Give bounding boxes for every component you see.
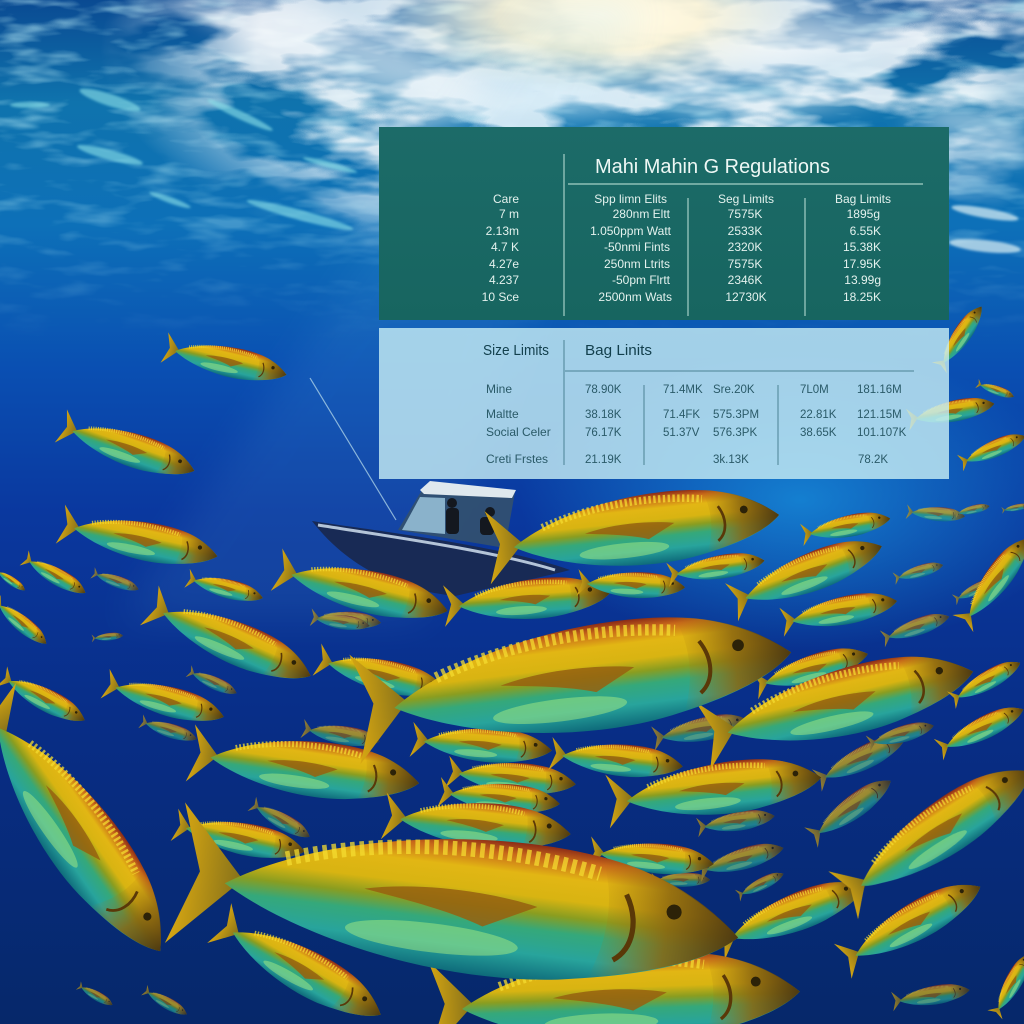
sub-headings: Size Limits	[483, 342, 549, 359]
third column: seg limits: 7575K	[728, 257, 762, 271]
value columns: 38.65K	[800, 427, 837, 439]
second column: spp limits: 2500nm Wats	[598, 290, 672, 304]
third column: seg limits: 2346K	[728, 273, 762, 287]
value columns: 576.3PK	[713, 427, 757, 439]
first column: care: 4.7 K	[491, 240, 519, 254]
first column: care: 4.237	[489, 273, 519, 287]
mid school of mahi-mahi	[0, 332, 1024, 1024]
fish behind translucent panel	[906, 302, 996, 431]
row labels: Creti Frstes	[486, 452, 548, 466]
value columns: 121.15M	[857, 409, 902, 421]
foreground fish: large bottom	[165, 801, 746, 1012]
row labels	[486, 382, 551, 466]
third column: seg limits	[718, 192, 774, 304]
sub-headings: Bag Linits	[585, 342, 652, 359]
value columns: 101.107K	[857, 427, 907, 439]
third column: seg limits: Seg Limits	[718, 192, 774, 206]
second column: spp limits: -50nmi Fints	[604, 240, 670, 254]
first column: care: 7 m	[499, 207, 519, 221]
foreground fish: large centre	[347, 600, 798, 764]
first column: care: Care	[493, 192, 519, 206]
fourth column: bag limits: 6.55K	[850, 224, 881, 238]
row labels: Social Celer	[486, 425, 551, 439]
value columns: 71.4MK	[663, 384, 703, 396]
value columns: Sre.20K	[713, 384, 755, 396]
second column: spp limits: -50pm Flrtt	[612, 273, 671, 287]
fourth column: bag limits: Bag Limits	[835, 192, 891, 206]
panel: lower size and bag limits table	[379, 328, 949, 479]
first column: care: 4.27e	[489, 257, 519, 271]
fourth column: bag limits: 18.25K	[843, 290, 881, 304]
value columns: 51.37V	[663, 427, 700, 439]
boat with anglers	[312, 481, 570, 596]
first column: care: 10 Sce	[482, 290, 519, 304]
second column: spp limits: Spp limn Elits	[594, 192, 667, 206]
heading: Mahi Mahin G Regulations	[595, 156, 830, 178]
far school of small fish	[76, 502, 1024, 1020]
foreground fish: lower right	[827, 749, 1024, 919]
second column: spp limits: 280nm Eltt	[613, 207, 671, 221]
value columns: 181.16M	[857, 384, 902, 396]
third column: seg limits: 2320K	[728, 240, 762, 254]
panel: top regulations table	[379, 127, 949, 320]
value columns: 575.3PM	[713, 409, 759, 421]
value columns	[585, 384, 907, 466]
fourth column: bag limits: 1895g	[847, 207, 880, 221]
second column: spp limits	[590, 192, 672, 304]
row labels: Maltte	[486, 407, 519, 421]
value columns: 7L0M	[800, 384, 829, 396]
fishing line	[310, 378, 396, 520]
second column: spp limits: 1.050ppm Watt	[590, 224, 672, 238]
fourth column: bag limits: 13.99g	[844, 273, 881, 287]
second column: spp limits: 250nm Ltrits	[604, 257, 670, 271]
fourth column: bag limits: 15.38K	[843, 240, 881, 254]
first column: care	[482, 192, 519, 304]
value columns: 21.19K	[585, 454, 622, 466]
value columns: 76.17K	[585, 427, 622, 439]
first column: care: 2.13m	[486, 224, 519, 238]
value columns: 3k.13K	[713, 454, 749, 466]
third column: seg limits: 2533K	[728, 224, 762, 238]
foreground fish: left edge	[0, 681, 190, 974]
row labels: Mine	[486, 382, 512, 396]
sub-headings	[483, 342, 652, 359]
value columns: 78.2K	[858, 454, 888, 466]
third column: seg limits: 12730K	[725, 290, 767, 304]
fourth column: bag limits	[835, 192, 891, 304]
value columns: 78.90K	[585, 384, 622, 396]
value columns: 71.4FK	[663, 409, 700, 421]
third column: seg limits: 7575K	[728, 207, 762, 221]
fourth column: bag limits: 17.95K	[843, 257, 881, 271]
foreground fish: centre	[483, 480, 783, 584]
value columns: 22.81K	[800, 409, 837, 421]
value columns: 38.18K	[585, 409, 622, 421]
